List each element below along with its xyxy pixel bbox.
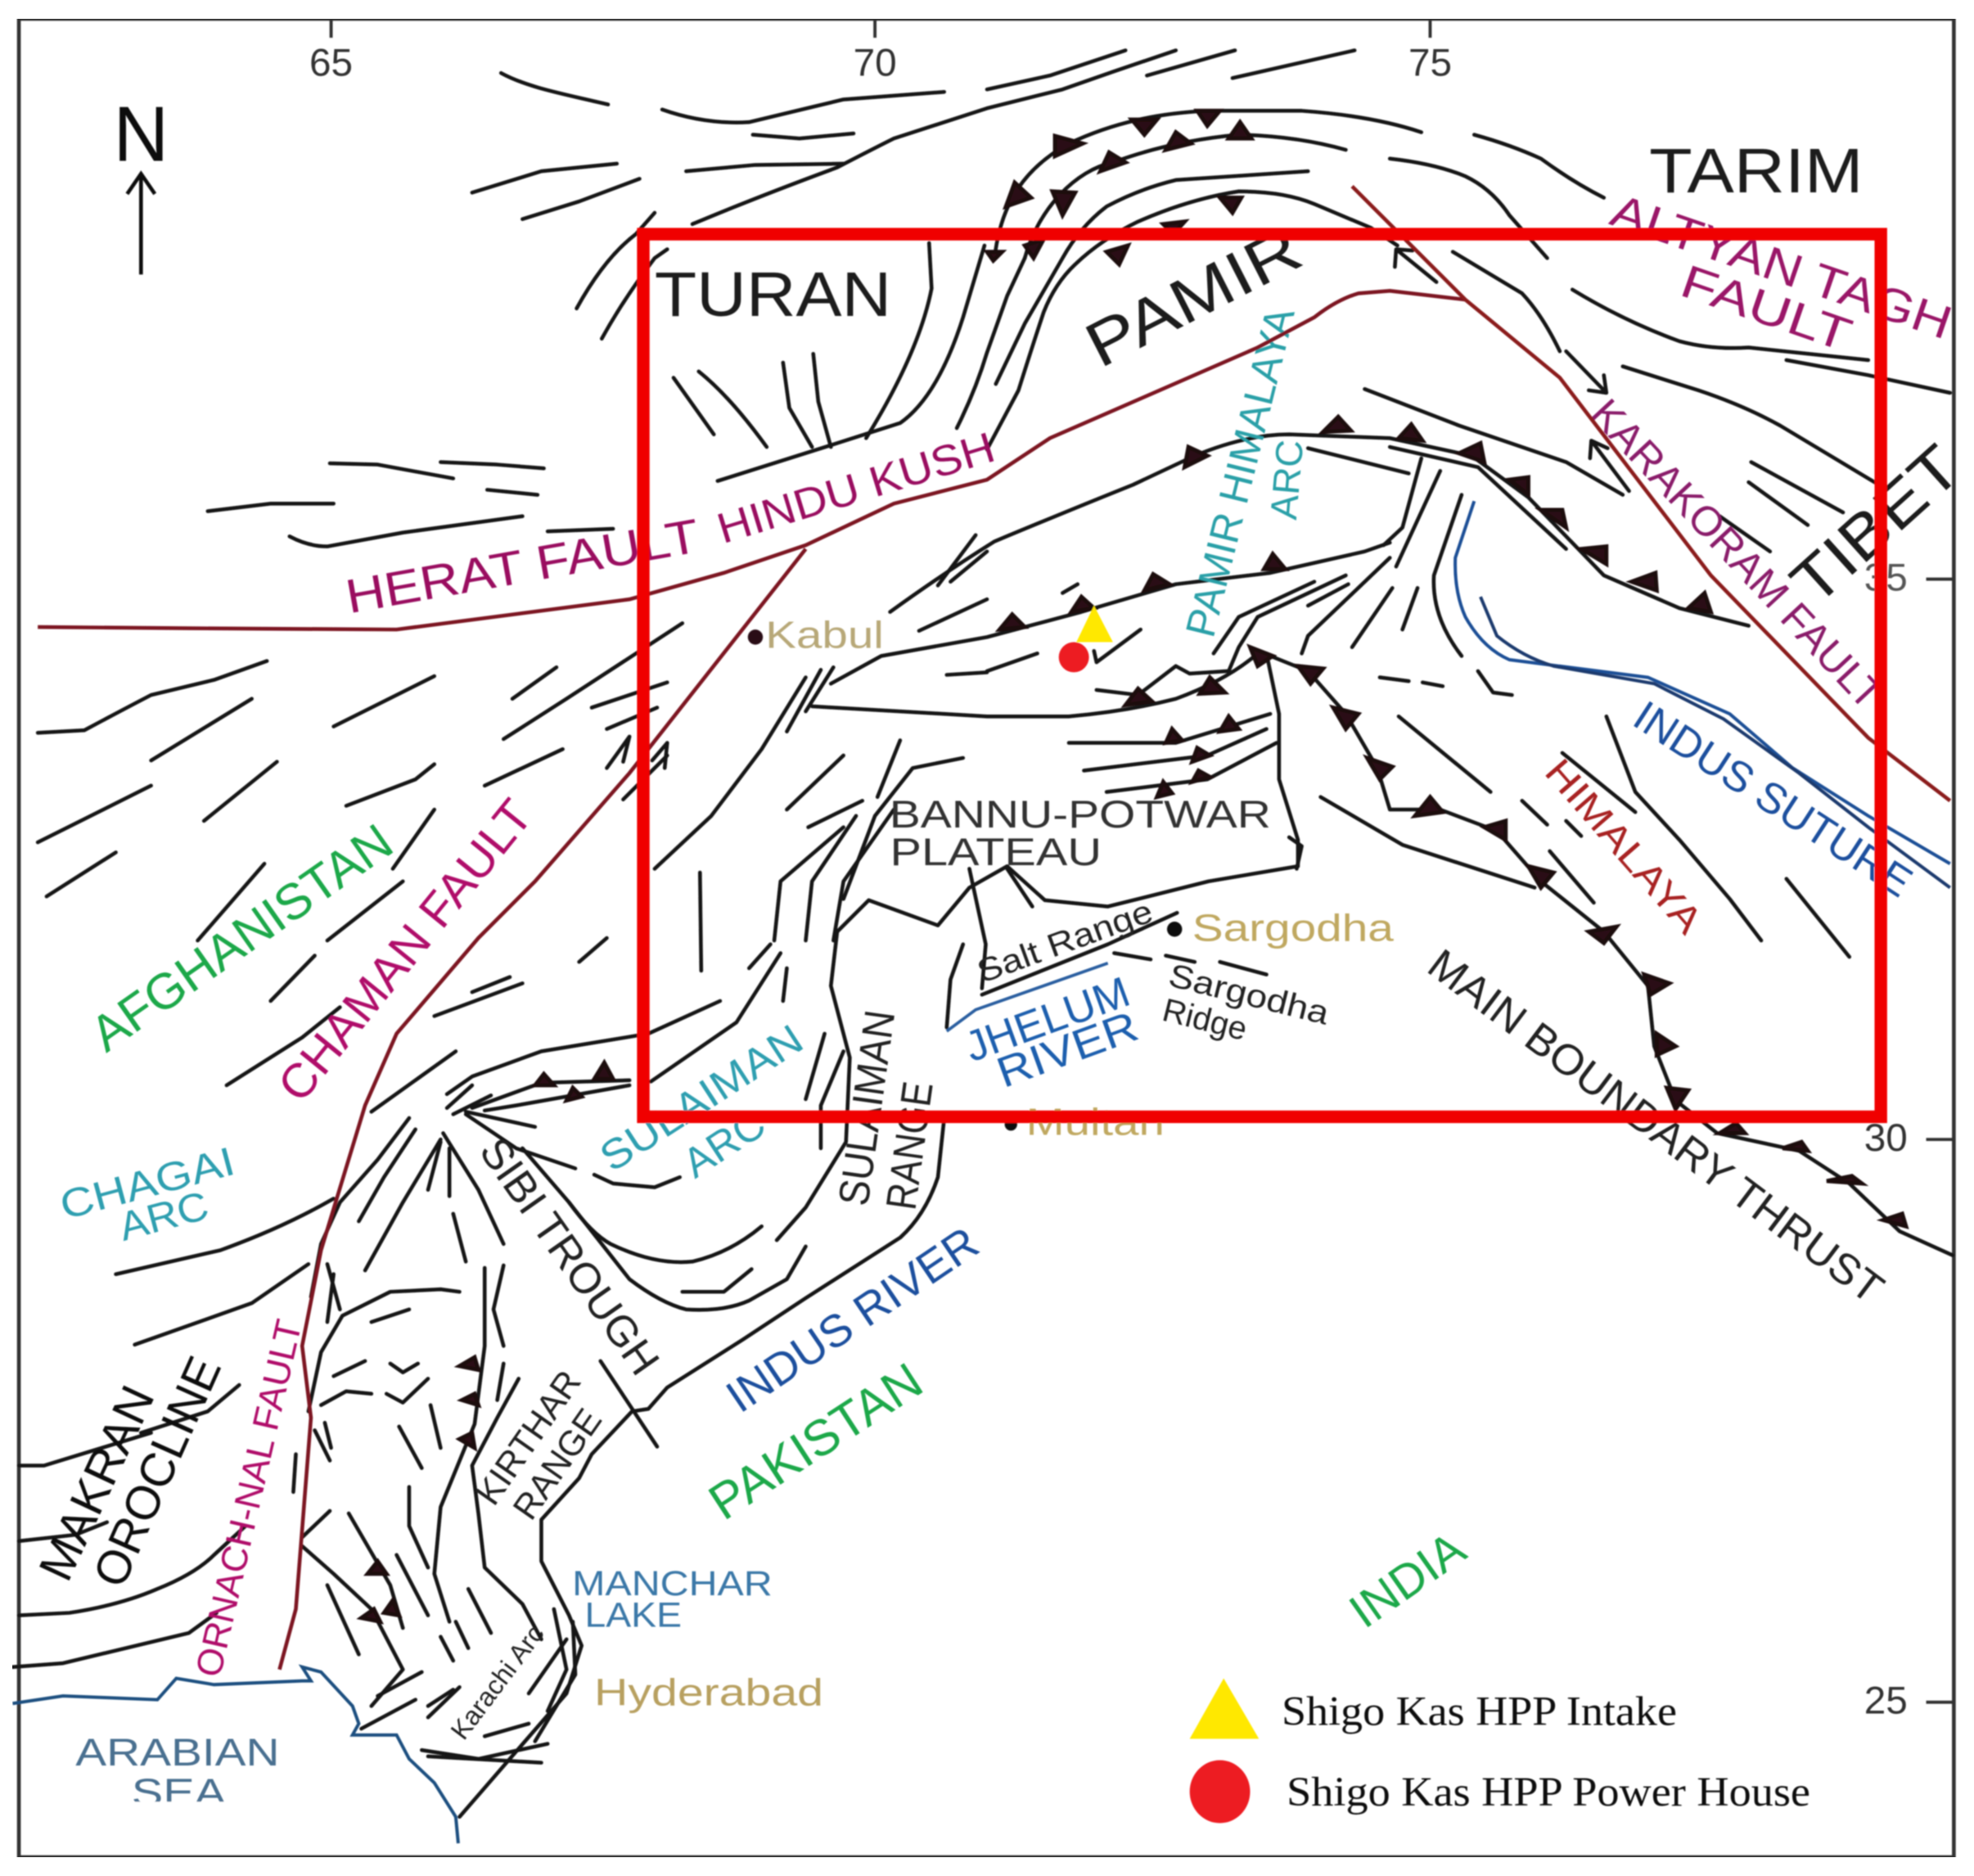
arc labels: ARC <box>114 1183 214 1250</box>
study area red box <box>643 234 1881 1116</box>
river and suture labels: INDUS RIVER <box>717 1217 988 1423</box>
region labels <box>655 136 1974 619</box>
region labels: TURAN <box>655 259 891 330</box>
place and structure labels: RANGE <box>506 1402 610 1527</box>
river and suture labels: RIVER <box>991 1003 1144 1098</box>
SEA label clipping mask <box>119 1802 239 1820</box>
fault lines: western area <box>12 462 683 1667</box>
region labels: TIBET <box>1778 431 1974 619</box>
fault labels: KARAKORAM FAULT <box>1582 390 1893 718</box>
fault labels: ORNACH-NAL FAULT <box>189 1316 310 1680</box>
river and suture labels: INDUS SUTURE <box>1625 692 1920 907</box>
fault lines: northern area <box>472 51 1950 552</box>
place and structure labels: SULAIMAN <box>830 1008 904 1209</box>
place and structure labels: PLATEAU <box>890 831 1102 874</box>
city: Sargodha: Sargodha <box>1192 907 1394 949</box>
place and structure labels: OROCLINE <box>83 1349 232 1594</box>
river and suture labels <box>75 692 1920 1815</box>
country labels: INDIA <box>1340 1522 1475 1639</box>
legend power house label: Shigo Kas HPP Power House <box>1287 1769 1810 1815</box>
place and structure labels: BANNU-POTWAR <box>890 793 1271 837</box>
fault labels <box>189 184 1958 1680</box>
north arrow <box>113 92 169 274</box>
Herat and Hindu Kush fault <box>38 291 1466 629</box>
marker: intake <box>1076 606 1113 643</box>
legend intake icon <box>1190 1678 1259 1738</box>
place and structure labels: Ridge <box>1159 992 1251 1048</box>
fault lines: southern Sulaiman and Kirthar area <box>293 1080 944 1817</box>
river and suture labels: SEA <box>132 1771 226 1815</box>
region labels: PAMIR <box>1075 213 1313 381</box>
arc labels: PAMIR HIMALAYA <box>1177 303 1304 642</box>
arc labels: CHAGAI <box>55 1139 240 1229</box>
place and structure labels: SIBI TROUGH <box>470 1130 668 1384</box>
river and suture labels: LAKE <box>585 1596 682 1635</box>
longitude and latitude labels: 70 <box>854 41 897 84</box>
country labels: AFGHANISTAN <box>80 814 403 1062</box>
city: Multan: Multan <box>1026 1101 1165 1143</box>
legend power house icon <box>1190 1760 1250 1823</box>
fault labels: HERAT FAULT <box>342 509 703 624</box>
Indus suture second line <box>1480 597 1950 887</box>
coastline <box>12 1667 458 1843</box>
Himalaya label: HIMALAYA <box>1537 751 1711 942</box>
place and structure labels: RANGE <box>878 1079 943 1213</box>
place and structure labels: KIRTHAR <box>468 1364 589 1513</box>
city: Kabul: Kabul <box>765 613 884 656</box>
place and structure labels: Karachi Arc <box>445 1619 550 1745</box>
river and suture labels: MANCHAR <box>572 1564 773 1603</box>
legend <box>1190 1678 1810 1823</box>
place and structure labels: Salt Range <box>972 894 1157 990</box>
fault labels: HINDU KUSH <box>712 424 1000 553</box>
river and suture labels: ARABIAN <box>75 1731 280 1775</box>
fault lines: central Himalaya and Potwar area <box>447 435 1953 1256</box>
Indus suture <box>1455 501 1950 864</box>
place and structure labels: MAIN BOUNDARY THRUST <box>1419 940 1892 1313</box>
fault labels: FAULT <box>1674 255 1858 362</box>
arc labels: SULAIMAN <box>592 1015 811 1180</box>
longitude and latitude labels: 75 <box>1408 41 1452 84</box>
Karakoram fault <box>1352 187 1950 800</box>
place and structure labels: MAKRAN <box>29 1378 165 1589</box>
Jhelum river <box>947 963 1108 1031</box>
arc labels <box>55 303 1311 1250</box>
Chaman fault <box>280 549 805 1670</box>
legend intake label: Shigo Kas HPP Intake <box>1282 1688 1677 1734</box>
country labels <box>80 814 1475 1639</box>
arc labels: ARC <box>674 1100 773 1187</box>
region labels: TARIM <box>1649 136 1864 206</box>
longitude and latitude ticks <box>331 19 1954 1702</box>
marker: power house <box>1059 643 1089 672</box>
place and structure labels <box>29 793 1892 1745</box>
place and structure labels: Sargodha <box>1165 958 1333 1032</box>
longitude and latitude labels: 35 <box>1864 557 1908 600</box>
longitude and latitude labels: 65 <box>309 41 353 84</box>
thrust triangles <box>361 110 1906 1621</box>
fault labels: ALTYAN TAGH <box>1604 184 1958 349</box>
longitude and latitude labels: 25 <box>1864 1680 1908 1723</box>
arc labels: ARC <box>1262 438 1311 521</box>
north arrow: N <box>113 92 169 178</box>
river and suture labels: JHELUM <box>959 968 1136 1071</box>
longitude and latitude labels <box>309 41 1908 1723</box>
country labels: PAKISTAN <box>699 1352 932 1531</box>
fault labels: CHAMAN FAULT <box>268 790 543 1112</box>
longitude and latitude labels: 30 <box>1864 1116 1908 1160</box>
city: Hyderabad: Hyderabad <box>594 1671 823 1713</box>
